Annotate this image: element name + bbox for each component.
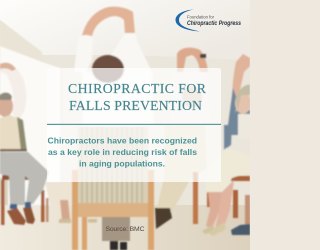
logo: Foundation for Chiropractic Progress xyxy=(176,10,241,32)
source credit: Source: BMC xyxy=(106,226,145,233)
logo wordmark: Foundation for xyxy=(187,14,215,20)
wooden chair back and dark shoes xyxy=(72,127,154,250)
body text: in aging populations. xyxy=(79,158,165,168)
translucent title panel xyxy=(47,68,221,124)
body text: as a key role in reducing risk of falls xyxy=(48,147,197,157)
body text: Chiropractors have been recognized xyxy=(48,136,197,146)
left person xyxy=(0,63,49,225)
logo wordmark xyxy=(187,14,241,27)
icon: blue swoosh xyxy=(176,10,200,32)
title: CHIROPRACTIC FOR xyxy=(68,81,207,96)
right person xyxy=(202,54,251,236)
woman seated centre-left, sandal and skirt xyxy=(45,182,97,223)
center-right person xyxy=(155,48,210,229)
center person xyxy=(74,7,154,125)
body text xyxy=(48,136,197,168)
title xyxy=(68,81,207,113)
background photo: seniors stretching in a room xyxy=(0,0,251,250)
title: FALLS PREVENTION xyxy=(69,98,202,113)
translucent body panel xyxy=(47,124,221,182)
